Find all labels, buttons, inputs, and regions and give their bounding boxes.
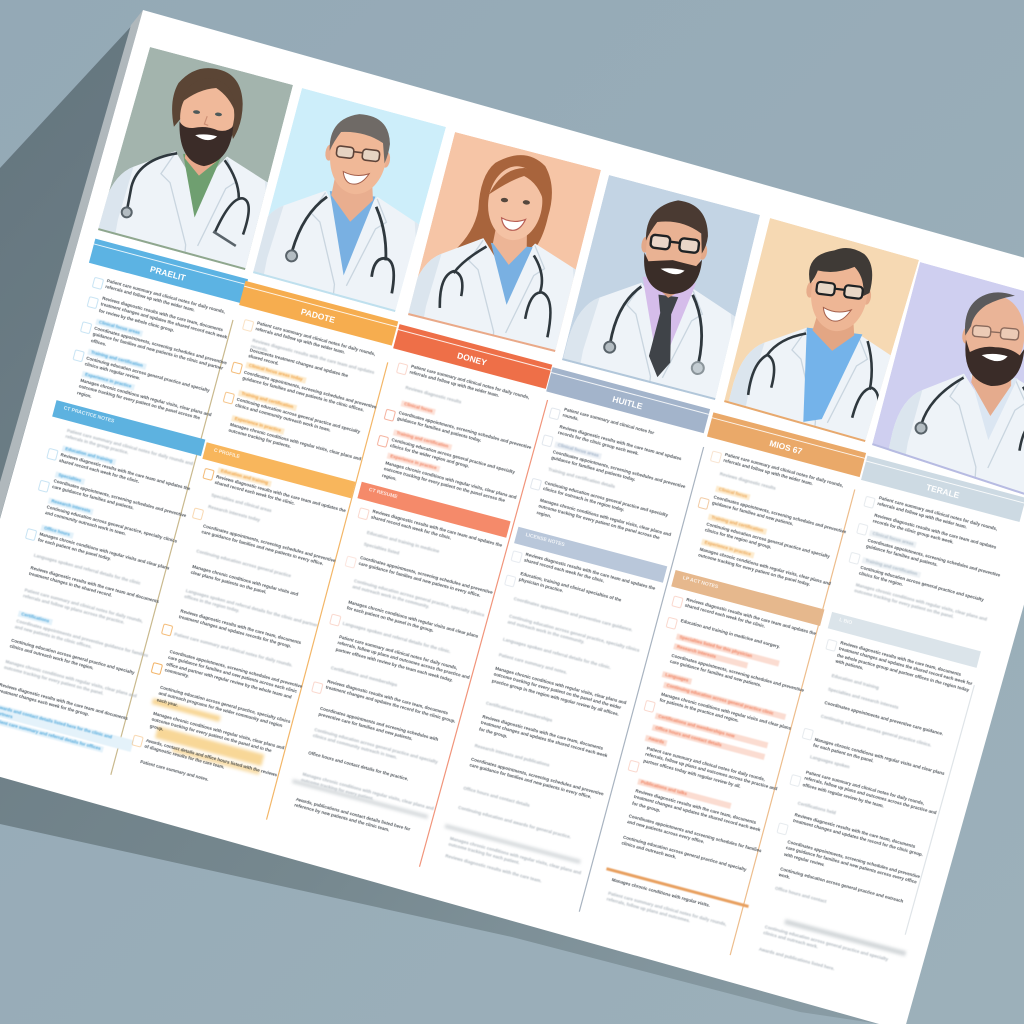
- column 3 lower text: Continuing education across general practice, specialty clinics and outreach work in the community.: [352, 578, 485, 618]
- column 5 header bar: MIOS 67: [768, 438, 803, 456]
- column 5 lower text: Patient care summary and clinical notes for daily rounds, referrals, follow up plans and outcomes across the practice and partner offices today with regular review by all.: [643, 746, 778, 792]
- column 3 sub-header bar: CT RESUME: [368, 487, 398, 500]
- column 4 upper text: Training and certification details: [548, 467, 616, 489]
- column 5 lower text: [606, 596, 817, 927]
- column 2: orange: [132, 280, 398, 782]
- column 4 header bar: [546, 367, 710, 433]
- column 2 upper text: Clinical focus areas today: [248, 363, 303, 382]
- column 6: pale blue: [758, 456, 1024, 971]
- column 2 lower text: Coordinates appointments, screening schedules and preventive care guidance for families and new patients across each clinic office and partner with regular review by the whole team and community.: [164, 649, 303, 699]
- column 4 lower text: Continuing education across general practice, specialty clinics and outreach work in the community.: [507, 613, 640, 653]
- column 3 lower text: Office hours and contact details for the practice.: [308, 750, 409, 782]
- column 5 upper text: Clinical focus: [718, 486, 748, 499]
- column 6 header bar: TERALE: [925, 482, 961, 500]
- column 3 upper text: Clinical focus: [404, 401, 433, 413]
- column 2 lower text: Manages chronic conditions with regular visits, clear plans and outcome tracking for every patient on the panel and in the group.: [149, 711, 285, 754]
- column 1 lower text: Reviews diagnostic results with the care team and documents treatment changes in the shared record.: [28, 565, 160, 604]
- column 5 lower text: Languages: [665, 672, 689, 683]
- column 3 header bar: [393, 324, 552, 389]
- column 4 lower text: Reviews diagnostic results with the care team and updates the shared record each week for the clinic.: [523, 552, 656, 591]
- column 2 sub-header bar: C PROFILE: [213, 448, 240, 460]
- column 1 upper text: Manages chronic conditions with regular visits, clear plans and outcome tracking for every patient on the panel across the region.: [77, 378, 212, 421]
- column 3 lower text: Coordinates appointments and screening schedules with preventive care for families and new patients.: [318, 706, 439, 742]
- column 1 upper text: Continuing education across general practice and specialty clinics with regular review.: [84, 355, 210, 393]
- column 1 sub-header bar: [52, 400, 205, 456]
- column 4 upper text: Reviews diagnostic results with the care team and updates records for the clinic group each week.: [557, 424, 682, 461]
- column 4 lower text: [445, 550, 656, 884]
- column 5: tan: [606, 412, 866, 927]
- column 2 lower text: Research interests today: [208, 504, 261, 523]
- column 1 lower text: Coordinates appointments and preventive guidance for families and new patients in the clinic offices.: [14, 618, 149, 658]
- column 4 lower text: Coordinates appointments and preventive care guidance.: [513, 596, 633, 632]
- column 6 lower text: Continuing education across general practice and outreach work.: [778, 866, 904, 904]
- column 3 lower text: Manages chronic conditions with regular visits and clear plans for each patient on the panel in the group.: [346, 599, 479, 639]
- column 5 lower text: Continuing education across general practice clinic: [666, 683, 774, 716]
- column 5 lower text: Manages chronic conditions with regular visits.: [611, 877, 711, 908]
- column 3 sub-header bar: [357, 482, 511, 538]
- column 6 upper text: Manages chronic conditions with regular visits, clear plans and outcome tracking for every patient on the panel.: [854, 582, 988, 622]
- column 5 upper text: Patient care summary and clinical notes for daily rounds, referrals and follow up with the wider team.: [723, 452, 844, 488]
- column 3 lower text: Specialties listed: [363, 541, 400, 556]
- column 6 upper text: [848, 495, 1001, 622]
- column 5 upper text: Training and certification: [711, 514, 764, 533]
- column 6 lower text: Specialties and research interests: [827, 686, 899, 710]
- column 2 lower text: Continuing education across general practice: [196, 548, 292, 578]
- column 6 lower text: Awards and publications listed here.: [758, 946, 835, 971]
- column 5 lower text: Coordinates appointments, screening schedules and preventive care guidance for families and new patients.: [669, 653, 805, 693]
- column 6 lower text: Languages spoken: [809, 754, 850, 769]
- column 1 lower text: Manages chronic conditions with regular visits and clear plans for each patient on the panel today.: [37, 531, 170, 571]
- column 5 lower text: Certifications and memberships now: [658, 714, 735, 739]
- column 6 upper text: Continuing education across general practice and specialty clinics for the region.: [858, 565, 984, 602]
- column 3 upper text: Training and certification: [396, 430, 449, 449]
- column 1 lower text: Education and training: [65, 446, 113, 463]
- column 5 lower text: Reviews diagnostic results with the care team, documents treatment changes and updates the shared record each week for the group.: [632, 788, 761, 833]
- column 5 lower text: Office hours and contact details: [655, 725, 722, 748]
- column 3 grey smudge: [292, 779, 428, 819]
- column 1 sub-header bar: CT PRACTICE NOTES: [63, 405, 115, 425]
- column 1 lower text: Continuing education across general practice, specialty clinics and community outreach work in town.: [45, 504, 178, 544]
- column 6 lower text: Continuing education across general practice clinics.: [820, 714, 932, 748]
- column 1: blue: [0, 238, 248, 753]
- column 6 grey smudge: [784, 919, 906, 956]
- column 1 lower text: Manages chronic conditions with regular visits, clear plans and outcome tracking for every patient on the panel.: [3, 659, 137, 699]
- column 2 yellow highlight smudges: [150, 696, 266, 776]
- column 1 upper text: Patient care summary and clinical notes for daily rounds, referrals and follow up with the wider team.: [105, 278, 226, 314]
- column 1 upper text: Coordinates appointments, screening schedules and preventive guidance for families and new patients in the clinic and partner offices.: [90, 325, 227, 371]
- column 3: red: [292, 324, 552, 833]
- column 1 lower text: Reviews diagnostic results with the care team and updates the shared record each week for the clinic.: [58, 452, 191, 491]
- column 2 lower text: Languages spoken and referral details for the clinic and partner offices in the region today.: [184, 588, 318, 628]
- column 4 upper text: Coordinates appointments, screening schedules and preventive guidance for families and patients today.: [551, 449, 686, 489]
- column 1 lower text: Continuing education across general practice and specialty clinics and outreach work for the region.: [9, 638, 135, 675]
- column 6 sub-header bar: [828, 612, 981, 668]
- column 4 header bar: HUITLE: [611, 394, 644, 411]
- column 6 upper text: Training and certification: [865, 558, 918, 576]
- column 5 upper text: Continuing education across general practice and specialty clinics for the region and group.: [704, 521, 830, 559]
- column 1 lower text: Patient care summary and clinical notes for daily rounds, referrals and follow up plans across the practice.: [22, 587, 144, 625]
- column 2 upper text: Continuing education across general practice and specialty clinics and community outreach work in town.: [235, 397, 361, 434]
- column 4 sub-header bar: [514, 527, 667, 583]
- column 4 lower text: Coordinates appointments, screening schedules and preventive care guidance for families and new patients in every office.: [469, 756, 604, 800]
- column 2 upper text: Experience in practice: [234, 416, 282, 433]
- column 6 lower text: Education and training: [831, 673, 880, 690]
- column 1 upper text: Reviews diagnostic results with the care team, documents treatment changes and updates the shared record each week for review by the whole clinic group.: [98, 296, 228, 340]
- column 2 lower text: Patient care summary and clinical notes for daily rounds.: [174, 632, 293, 668]
- column 3 lower text: Reviews diagnostic results with the care team and updates the shared record each week for the clinic.: [370, 509, 503, 548]
- column 2 lower text: Coordinates appointments, screening schedules and preventive care guidance for families and new patients in every office.: [201, 523, 336, 567]
- column 5 orange band: [606, 867, 749, 908]
- column 6 lower text: Coordinates appointments and preventive care guidance.: [824, 700, 944, 736]
- column 6 lower text: Reviews diagnostic results with the care team, documents treatment changes and updates the shared record each week for the whole practice group and partner offices in the region today with patients.: [835, 640, 973, 692]
- column 3 upper text: Manages chronic conditions with regular visits, clear plans and outcome tracking for every patient on the panel across the region.: [382, 460, 517, 504]
- column 2 lower text: Reviews diagnostic results with the care team and updates the shared record each week for the clinic.: [214, 474, 346, 513]
- portrait row: [98, 47, 1024, 495]
- column 4 lower text: Reviews diagnostic results with the care team.: [445, 853, 542, 884]
- column 6 lower text: Coordinates appointments, screening schedules and preventive care guidance for families and new patients across every office with regular review.: [784, 839, 921, 885]
- column 5 upper text: Coordinates appointments, screening schedules and preventive guidance for families and new patients.: [711, 494, 847, 534]
- column 3 header bar: DONEY: [456, 350, 488, 368]
- column 6 lower text: [758, 639, 973, 971]
- column 4 lower text: Research interests and publications: [474, 743, 550, 768]
- column 5 lower text: Specialties listed for this physician: [679, 634, 753, 658]
- column 2 upper text: Reviews diagnostic results with the care team and updates records.: [250, 338, 375, 375]
- column 5 lower text: Coordinates appointments and screening schedules for families and new patients across every office.: [627, 813, 762, 853]
- column 3 lower text: Education and training in medicine: [366, 530, 440, 554]
- column 3 upper text: Continuing education across general practice and specialty clinics for the wider region and group.: [389, 437, 516, 475]
- column 2 lower text: Awards, contact details and office hours listed with the reviews of diagnostic results for the care team.: [144, 738, 278, 777]
- column 4 lower text: Reviews diagnostic results with the care team, documents treatment changes and updates the shared record each week for the group.: [479, 714, 608, 759]
- column 1 upper text: [72, 277, 228, 421]
- column 6 lower text: Continuing education across general practice and specialty clinics and outreach work.: [763, 924, 889, 962]
- column 2 header bar: [239, 281, 398, 346]
- column 6 upper text: Patient care summary and clinical notes for daily rounds, referrals and follow up with the wider team.: [877, 495, 998, 531]
- column 4 sub-header bar: LICENSE NOTES: [525, 532, 565, 548]
- column 5 lower text: Education and training in medicine and surgery.: [680, 618, 781, 649]
- column 4 lower text: Education, training and clinical specialties of the physician in practice.: [518, 571, 622, 603]
- column 3 upper text: Coordinates appointments, screening schedules and preventive guidance for families and patients today.: [397, 410, 532, 450]
- column 2 header bar: PADOTE: [300, 306, 336, 325]
- column 1 lower text: Certifications: [21, 611, 50, 624]
- column 6 header bar: [861, 456, 1024, 522]
- column 2 upper text: Manages chronic conditions with regular visits, clear plans and outcome tracking for patients.: [228, 422, 362, 461]
- column 2 upper text: [222, 319, 377, 461]
- column 5 header bar: [707, 412, 866, 477]
- portrait 6: balding doctor with beard and thin glasses: [872, 262, 1024, 495]
- column 6 lower text: Office hours and contact: [775, 886, 827, 904]
- column 4 upper text: Manages chronic conditions with regular visits, clear plans and outcome tracking for every patient on the panel across the region.: [536, 497, 672, 541]
- column 6 upper text: Clinical focus areas: [872, 531, 914, 546]
- column 6 lower text: Patient care summary and clinical notes for daily rounds, referrals, follow up plans and outcomes across the practice and offices with regular review by the team.: [802, 770, 937, 816]
- column 2 upper text: Documents treatment changes and updates the shared record.: [248, 347, 349, 378]
- column 3 lower text: Reviews diagnostic results with the care team, documents treatment changes and updates the record for the clinic group.: [325, 679, 456, 724]
- column 1 lower text: Coordinates appointments, screening schedules and preventive care guidance for families and patients.: [51, 478, 187, 518]
- column 5 upper text: Reviews diagnostic results: [719, 471, 776, 491]
- column 6 lower text: Certifications held: [797, 801, 836, 815]
- column 5 upper text: Manages chronic conditions with regular visits, clear plans and outcome tracking for every patient on the panel today.: [698, 547, 831, 587]
- column 5 lower text: Patient care summary and clinical notes for daily rounds, referrals, follow up plans and outcomes.: [606, 891, 727, 927]
- column 6 upper text: Reviews diagnostic results with the care team and updates records for the clinic group each week.: [872, 513, 997, 550]
- column 5 lower text: Awards: [648, 736, 665, 745]
- column 1 lower text: Languages spoken and referral details for the clinic: [33, 553, 141, 586]
- column 2 lower text: Continuing education across general practice, specialty clinics and outreach programs for the wider community and region each year.: [156, 685, 291, 729]
- column 6 sub-header bar: L BIO: [838, 617, 853, 626]
- column 2 upper text: Patient care summary and clinical notes for daily rounds, referrals and follow up with the wider team.: [255, 320, 376, 357]
- column 1 lower text: Office hours: [44, 525, 71, 537]
- portrait 5: smiling doctor with dark hair and glasses: [724, 218, 919, 442]
- column 5 lower text: Publications and talks: [640, 779, 688, 796]
- column 2 lower text: Education and training: [220, 468, 269, 485]
- column 3 lower text: [294, 508, 503, 833]
- column 4 lower text: Languages spoken and referral details for the clinic.: [502, 637, 611, 670]
- column 1 lower text: [0, 428, 194, 753]
- column 1 header bar: PRAELIT: [149, 264, 187, 283]
- column 4 lower text: Certifications and memberships: [485, 700, 553, 723]
- column 5 sub-header bar: [671, 570, 824, 626]
- column 2 upper text: Coordinates appointments, screening schedules and preventive guidance for families and new patients in the clinic offices.: [242, 370, 377, 413]
- column 4 upper text: Patient care summary and clinical notes for rounds.: [562, 407, 655, 435]
- column 4 lower text: Patient care summary and notes.: [498, 652, 568, 675]
- column 2 lower text: Specialties and clinical areas: [211, 492, 272, 513]
- portrait 4: doctor with beard, tie and glasses: [562, 175, 760, 400]
- column 4 lower text: Continuing education and awards for general practice.: [458, 805, 572, 840]
- column 6 upper text: Coordinates appointments, screening schedules and preventive guidance for families and patients.: [865, 538, 1001, 578]
- column 6 lower text: Reviews diagnostic results with the care team, documents treatment changes and updates the record for the clinic group.: [792, 812, 923, 858]
- column 5 lower text: Research interests: [676, 644, 717, 659]
- column 1 upper text: Clinical focus areas: [98, 319, 141, 335]
- column 1 header bar: [89, 239, 248, 303]
- column 2 lower text: [132, 467, 346, 782]
- column 1 upper text: Experience in practice: [85, 372, 132, 389]
- portrait 3: woman with auburn hair: [408, 132, 601, 352]
- column 3 lower text: Languages spoken and referral details for the clinic.: [342, 621, 451, 654]
- column 5 sub-header bar: LP ACT NOTES: [682, 575, 719, 590]
- column 2 upper text: Training and certification: [241, 391, 294, 409]
- column 5 upper text: Experience in practice: [704, 540, 752, 557]
- column 2 lower text: Patient care summary and notes.: [140, 759, 209, 782]
- column 3 upper text: Experience in practice: [390, 453, 437, 470]
- column 5 lower text: Continuing education across general practice and specialty clinics and outreach work.: [621, 835, 747, 872]
- column 3 upper text: Patient care summary and clinical notes for daily rounds, referrals and follow up with the wider team.: [409, 364, 530, 400]
- column 3 upper text: Reviews diagnostic results: [405, 385, 462, 405]
- column 3 lower text: Manages chronic conditions with regular visits, clear plans and outcome tracking for every patient.: [300, 771, 434, 811]
- column 3 lower text: Continuing education across general practice and specialty clinics and community outreach in town.: [312, 727, 438, 765]
- portrait 1: long-haired bearded doctor: [98, 47, 293, 270]
- column 6 lower text: Manages chronic conditions with regular visits and clear plans for each patient on the panel.: [812, 737, 945, 776]
- column 4 lower text: Manages chronic conditions with regular visits, clear plans and outcome tracking for every patient on the panel and the wider practice group in the region with regular review by all offices.: [491, 666, 627, 717]
- column 4 upper text: Continuing education across general practice and specialty clinics for outreach in the region today.: [542, 480, 669, 518]
- column 1 lower text: Patient care summary and clinical notes for daily rounds and referrals in the group practice.: [65, 428, 194, 466]
- column 5 lower text: Manages chronic conditions with regular visits and clear plans for patients in the practice and region.: [659, 692, 792, 731]
- column 3 lower text: Coordinates appointments, screening schedules and preventive care guidance for families and new patients in every office.: [358, 555, 493, 598]
- portrait 2: doctor with glasses and blue shirt: [253, 88, 446, 312]
- column 4 upper text: Clinical focus areas: [557, 442, 599, 458]
- column 1 lower text: Reviews diagnostic results with the care team and documents treatment changes each week for the group.: [0, 682, 128, 721]
- column 5 upper text: [698, 450, 847, 587]
- column 4 grey smudge: [445, 824, 581, 864]
- column 1 lower text: Specialties: [58, 472, 82, 483]
- column 1 lower text: Research interests: [51, 498, 91, 513]
- column 2 sub-header bar: [202, 442, 356, 498]
- column 5 lower text: Reviews diagnostic results with the care team and updates the shared record each week for the clinic.: [684, 597, 817, 636]
- column 3 lower text: Patient care summary and clinical notes for daily rounds, referrals, follow up plans and outcomes across the practice and partner offices with review by the team each week today.: [335, 634, 470, 683]
- column 3 upper text: [376, 362, 532, 504]
- column 2 lower text: Reviews diagnostic results with the care team, documents treatment changes and updates records for the group.: [178, 608, 302, 649]
- column 4: slate: [444, 367, 710, 884]
- column 4 lower text: Manages chronic conditions with regular visits, clear plans and outcome tracking for each patient.: [448, 836, 582, 875]
- column 4 lower text: Office hours and contact details: [463, 785, 530, 808]
- column 4 upper text: [530, 407, 686, 541]
- column 3 lower text: Certifications and memberships: [330, 665, 398, 688]
- column 3 lower text: Awards, publications and contact details listed here for reference by new patients and the clinic team.: [294, 797, 411, 833]
- column 2 lower text: Manages chronic conditions with regular visits and clear plans for patients on the panel.: [190, 564, 299, 597]
- column 1 upper text: Training and certification: [90, 349, 143, 368]
